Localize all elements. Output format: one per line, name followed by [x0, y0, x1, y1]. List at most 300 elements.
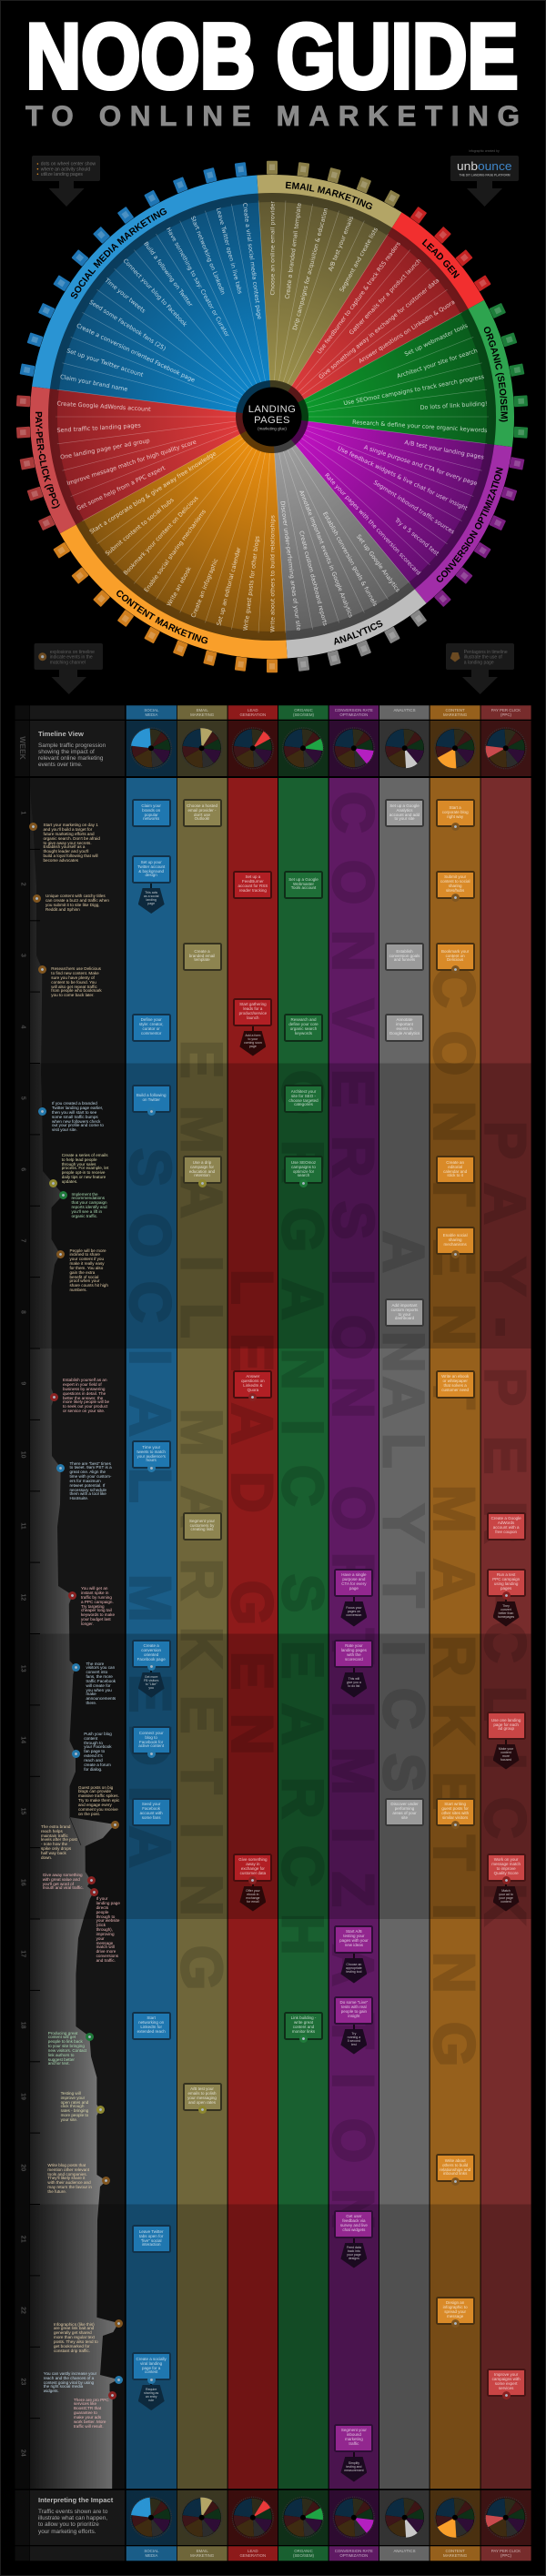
- watermark channel names: CONTENT MARKETING: [422, 966, 486, 2066]
- task: social 7: Connect your: [139, 1731, 164, 1735]
- pentagon: testing tool: Choose an: [346, 1962, 361, 1965]
- note: blog posts mention: [47, 2163, 92, 2194]
- task: organic 2: define your core: [288, 1022, 318, 1026]
- task: social 8: Facebook: [142, 1806, 160, 1811]
- arrow: right top: [467, 181, 502, 207]
- pentagon: match ad: your page: [499, 1896, 513, 1900]
- header: ppc top: (PPC): [500, 712, 511, 717]
- pentagon: convert better: They: [502, 1603, 510, 1607]
- pentagon: require sharing: Require: [146, 2388, 157, 2391]
- callout: unbounce logo: THE DIY LANDING PAGE PLATFORM: [460, 173, 511, 177]
- arrow: right bottom: [462, 670, 498, 694]
- note: link back: to your site bringing: [48, 2044, 85, 2048]
- task: social 1: brands on: [142, 808, 160, 813]
- mini pie: ppc top: [485, 728, 526, 769]
- task: analytics 5: Discover under: [390, 1802, 419, 1806]
- note: blog posts mention: mention other relevant: [47, 2167, 89, 2172]
- note: social sharing: inclined to share: [69, 1252, 100, 1257]
- task: lead 4: [233, 1853, 272, 1882]
- note: link back: anchor text.: [48, 2061, 70, 2066]
- task: lead 3: Answer: [246, 1374, 259, 1379]
- callout: pentagons legend: a landing page: [464, 660, 494, 665]
- heading: interpreting the impact: Interpreting the Impact: [38, 2496, 113, 2504]
- task: social 10: interaction: [142, 2242, 161, 2247]
- note: social widgets: contest going viral by using: [44, 2380, 94, 2385]
- task: lead 4: customer data: [240, 1871, 266, 1875]
- task: conversion 2: with the: [347, 1652, 361, 1657]
- pentagon: social landing page: [138, 884, 165, 914]
- task: conversion 1: CTA for every: [341, 1581, 366, 1586]
- pentagon: testing tool: [340, 1953, 367, 1984]
- task: content 1: right way: [447, 814, 463, 819]
- wheel activity labels: right half: Research & define your core organic keywords: [352, 419, 488, 434]
- task: ppc 3: [487, 1711, 526, 1740]
- task: social 7: Facebook for: [139, 1740, 163, 1743]
- task: email 3: [182, 1156, 222, 1184]
- note: best times to tweet: retweet potential. If: [69, 1483, 105, 1488]
- callout: unbounce logo: unbounce: [457, 160, 512, 173]
- task: social 8: account with: [140, 1811, 163, 1815]
- note: blog posts mention: may return the favour in: [47, 2185, 92, 2189]
- note: click through: conversions: [96, 1954, 118, 1958]
- task: email 4: creating lists: [190, 1527, 213, 1531]
- task: analytics 4: [385, 1298, 424, 1327]
- note: push blog content: extend it's: [84, 1753, 103, 1758]
- header: email top: [190, 708, 214, 717]
- callout: unbounce logo: infographic created by: [469, 149, 500, 153]
- task: social 11: Create a socially: [136, 2357, 167, 2361]
- pentagon: convert better: better than: [499, 1611, 513, 1614]
- note: infographics: generally get shared: [54, 2330, 92, 2335]
- note: guest posts: Guest posts on big: [78, 1785, 113, 1790]
- task: ppc 1: free coupon: [495, 1530, 517, 1534]
- note: answering questions: to seek out your product: [63, 1404, 107, 1409]
- task: social 10: tabs open for: [139, 2234, 163, 2238]
- wheel divider lines: [56, 200, 489, 633]
- heading: timeline view: Timeline View: [38, 730, 84, 737]
- note: push blog content: create a forum: [84, 1763, 111, 1767]
- task: organic 3: Architect your: [291, 1089, 316, 1094]
- note: infographics: constant drip traffic.: [54, 2349, 90, 2353]
- pentagon: feed data back: Feed data: [347, 2246, 361, 2249]
- week numbers: 9: [20, 1381, 25, 1385]
- note: campaign recommendations: Implement the: [71, 1192, 98, 1197]
- task: content 3: [436, 943, 475, 970]
- wheel activity labels: left half: Build a following on Twitter: [142, 240, 195, 308]
- task: organic 3: [284, 1085, 323, 1113]
- wheel channel names on ring: ORGANIC (SEO/SEM): [484, 327, 508, 422]
- task: content 2: sharing: [449, 884, 462, 888]
- mini pie: content top: [435, 728, 475, 769]
- note: guest posts: blogs can provide: [78, 1789, 111, 1793]
- note: week 1: build a loyal following that will: [44, 854, 98, 858]
- note: twitter landing page: Twitter landing page earlier,: [52, 1106, 103, 1110]
- task: ppc 3: ad group: [498, 1726, 514, 1731]
- task: content 4: editorial: [448, 1165, 462, 1169]
- task: social 5: tweets to match: [136, 1450, 166, 1454]
- note: pro ppc services: BoostCTR that: [74, 2406, 101, 2410]
- pentagon: simplify testing: measurement: [344, 2468, 364, 2471]
- header: content bottom: CONTENT: [445, 2548, 465, 2553]
- task: social 1: networks: [143, 816, 159, 821]
- wheel activity labels: right half: Gather emails for a product launch: [348, 258, 422, 337]
- mini pie: email top: [181, 728, 222, 769]
- note: facebook fans: The more: [86, 1662, 104, 1666]
- task: analytics 5: areas of your: [392, 1811, 417, 1815]
- pentagon: social landing page: This acts: [145, 891, 157, 894]
- week numbers: 23: [20, 2379, 25, 2385]
- wheel activity labels: left half: Get some help from a PPC expert: [76, 464, 167, 512]
- wheel activity labels: right half: Use SEOmoz campaigns to track search progress: [343, 373, 485, 407]
- note: twitter landing page: some small traffic bumps: [52, 1115, 98, 1119]
- task: content 7: similar visitors: [442, 1815, 468, 1820]
- task: analytics 2: [385, 943, 424, 970]
- text: interpreting description: to allow you to prioritize: [38, 2521, 99, 2528]
- note: unique content: can create a buzz and traffic when: [46, 898, 109, 903]
- task: social 1: Claim your: [141, 803, 161, 808]
- task: lead 3: questions on: [241, 1379, 265, 1383]
- note: facebook fans: traffic Facebook: [86, 1679, 116, 1683]
- pentagon: simplify testing: [340, 2451, 367, 2482]
- watermark channel names: LEAD GEN: [220, 1269, 284, 1754]
- note: click through: people: [96, 1910, 108, 1914]
- note: push blog content: your Facebook: [84, 1744, 112, 1749]
- wheel activity labels: left half: [56, 202, 276, 632]
- pentagon: coming soon form: coming soon: [244, 1041, 262, 1045]
- task: email 1: [182, 799, 222, 827]
- task: ppc 1: account with a: [493, 1525, 519, 1530]
- note: blog posts mention: with their audience and: [47, 2180, 91, 2185]
- note: social sharing: for them. You also: [69, 1266, 103, 1270]
- task: analytics 4: custom reports: [391, 1308, 418, 1312]
- header: content bottom: [443, 2548, 467, 2558]
- task: social 5: hours: [147, 1458, 157, 1462]
- wheel outer tabs: [16, 161, 528, 672]
- note: unique content: Unique content with catchy titles: [46, 894, 106, 898]
- note: click through: landing page: [96, 1901, 120, 1905]
- wheel activity labels: right half: A single purpose and CTA for every page: [363, 443, 479, 487]
- task: organic 4: campaigns to: [291, 1165, 316, 1169]
- note: extra brand reach: down.: [41, 1855, 52, 1860]
- task: social 7: active content: [138, 1743, 164, 1748]
- task: content 7: Start writing: [444, 1802, 466, 1806]
- wheel activity labels: right half: Create custom dashboard reports: [298, 530, 329, 627]
- note: click through: your website: [96, 1918, 119, 1923]
- task: content 2: Submit your: [444, 874, 466, 879]
- note: blog posts mention: tools and companies.: [47, 2172, 87, 2177]
- task: organic 2: organic search: [290, 1026, 317, 1031]
- note: give away: Give away something: [43, 1873, 83, 1877]
- task: conversion 3: pages with your: [339, 1938, 369, 1943]
- note: week 1: Start your marketing on day 1: [44, 823, 98, 827]
- text: interpreting description: your marketing efforts.: [38, 2529, 96, 2535]
- task: organic 2: keywords: [295, 1031, 312, 1035]
- task: conversion 6: inbound: [347, 2432, 361, 2437]
- note: best times to tweet: necessary schedule: [69, 1488, 106, 1492]
- panel: channel columns: [126, 778, 531, 2489]
- header: analytics bottom: ANALYTICS: [393, 2548, 416, 2553]
- note: twitter landing page: visit your site.: [52, 1127, 77, 1132]
- task: email 4: Segment your: [189, 1519, 215, 1523]
- task: ppc 1: AdWords: [498, 1520, 514, 1525]
- task: organic 5: [284, 2011, 323, 2040]
- wheel activity labels: left half: One landing page per ad group: [60, 437, 150, 461]
- note: extra brand reach: reach helps: [41, 1829, 63, 1834]
- note: push blog content: through to: [84, 1741, 103, 1745]
- task: content 4: calendar and: [443, 1168, 467, 1174]
- callout: dots explanation: utilize landing pages: [41, 172, 83, 177]
- header: organic top: [293, 708, 314, 717]
- pentagon: convert better: [493, 1600, 519, 1627]
- task: content 7: [436, 1798, 475, 1825]
- task: analytics 2: Establish: [396, 949, 413, 954]
- note: twitter landing page: out your profile and come to: [52, 1123, 104, 1127]
- note: email testing: Testing will: [61, 2091, 81, 2096]
- pentagon: to do list: give you a: [347, 1680, 361, 1683]
- note: push blog content: content: [84, 1736, 97, 1741]
- task: organic 5: monitor links: [292, 2029, 315, 2034]
- mini pie: organic bottom: [283, 2497, 323, 2538]
- wheel hub: landing pages: (marketing glue): [258, 426, 287, 431]
- task: content 1: [436, 799, 475, 827]
- note: link back: Producing great: [48, 2031, 77, 2036]
- pentagon: to do list: This will: [349, 1676, 359, 1680]
- task: social 8: Seed your: [142, 1802, 160, 1806]
- task: analytics 3: Annotate: [396, 1017, 413, 1022]
- pentagon: convert better: convert: [500, 1607, 511, 1611]
- pentagon: match ad: content: [500, 1900, 511, 1904]
- task: email 5: and open rates: [188, 2100, 216, 2105]
- week numbers: WEEK: [18, 736, 27, 761]
- note: week 1: Establish yourself as a: [44, 844, 85, 849]
- note: email testing: open rates and: [61, 2100, 88, 2105]
- note: delicious: sure you have plenty of: [51, 975, 95, 980]
- note: ppc spike: instant spike in: [81, 1591, 108, 1595]
- note: push blog content: [84, 1732, 112, 1772]
- task: social 5: Time your: [142, 1445, 160, 1450]
- wheel activity labels: left half: Have something to say: Creator or Curator: [165, 227, 231, 338]
- note: infographics: more than regular text: [54, 2335, 95, 2339]
- task: content 6: Write an ebook: [441, 1374, 469, 1379]
- note: blog posts mention: Write blog posts that: [47, 2163, 86, 2167]
- task: content 9: message: [447, 2314, 463, 2318]
- task: analytics 3: [385, 1014, 424, 1041]
- task: content 1: corporate blog: [442, 810, 469, 814]
- pentagon: more focused: [493, 1740, 519, 1769]
- wheel activity labels: right half: Segment and create lists: [338, 226, 379, 293]
- task: social 5: your audience's: [136, 1454, 166, 1458]
- task: conversion 1: Have a single: [341, 1572, 367, 1577]
- note: social sharing: proof when your: [69, 1278, 99, 1283]
- note: email testing: [60, 2091, 88, 2122]
- task: lead 4: exchange for: [241, 1866, 265, 1871]
- note: pro ppc services: There are pro PPC: [74, 2398, 109, 2402]
- text: timeline description: showing the impact of: [38, 749, 95, 755]
- wheel activity labels: right half: Choose an online email provider: [268, 201, 276, 295]
- task: content 7: guest posts for: [441, 1806, 469, 1811]
- task: analytics 3: important: [396, 1022, 413, 1026]
- note: ppc spike: Try targeting: [81, 1604, 105, 1609]
- note: facebook fans: [86, 1662, 116, 1705]
- week numbers: 5: [20, 1096, 25, 1100]
- note: blog posts mention: They'll likely share it: [47, 2176, 85, 2180]
- task: email 3: retention: [194, 1173, 210, 1177]
- task: lead 3: LinkedIn &: [243, 1383, 263, 1388]
- note: week 1: future marketing efforts and: [44, 832, 95, 836]
- note: extra brand reach: [41, 1824, 77, 1860]
- note: email series: process. For example, let: [62, 1166, 108, 1170]
- note: guest posts: and engage every: [78, 1803, 112, 1807]
- header: conversion bottom: CONVERSION RATE: [335, 2548, 373, 2553]
- mini pie: analytics top: [384, 728, 425, 769]
- wheel activity labels: right half: [268, 201, 488, 631]
- task: conversion 1: purpose and: [342, 1577, 365, 1581]
- note: social sharing: share counts hit high: [69, 1283, 108, 1288]
- mini pie: conversion top: [333, 728, 374, 769]
- header: lead top: [239, 708, 266, 717]
- task: analytics 1: to your site: [394, 816, 415, 821]
- wheel activity labels: left half: Write about others to build relationships: [268, 514, 276, 632]
- note: ppc spike: longer.: [81, 1621, 94, 1626]
- note: link back: [47, 2031, 87, 2066]
- note: campaign recommendations: you'll see a lift in: [71, 1209, 102, 1214]
- task: organic 2: Research and: [290, 1017, 317, 1022]
- callout: dots explanation: where an activity should: [41, 167, 90, 172]
- task: content 4: [436, 1156, 475, 1184]
- note: link back: suggest better: [48, 2057, 75, 2062]
- task: email 3: campaign for: [190, 1165, 214, 1169]
- header: ppc bottom: PAY PER CLICK: [491, 2548, 521, 2553]
- note: click through: [96, 1896, 120, 1963]
- wheel inner wedges: [48, 193, 496, 641]
- task: organic 4: Use SEOmoz: [291, 1160, 316, 1165]
- note: pro ppc services: services like: [74, 2401, 96, 2406]
- task: social 9: [132, 2011, 171, 2040]
- task: content 8: inbound links: [443, 2171, 467, 2176]
- task: ppc 1: Create a Google: [491, 1516, 521, 1520]
- wheel ring sectors: [30, 175, 514, 659]
- note: give away: [42, 1873, 84, 1890]
- callout: explosions legend: matching channel: [50, 660, 86, 665]
- note: facebook fans: announcements: [86, 1696, 116, 1701]
- task: content 1: Start a: [450, 805, 461, 810]
- task: conversion 6: Segment your: [341, 2428, 367, 2432]
- pentagon: social landing page: as a social: [144, 894, 158, 898]
- task: organic 1: Set up a Google: [288, 877, 318, 882]
- task: social 10: Leave Twitter: [139, 2229, 164, 2234]
- note: pro ppc services: traffic will result.: [74, 2424, 104, 2429]
- text: timeline description: events over time.: [38, 762, 83, 768]
- note: social widgets: the right social media: [44, 2384, 83, 2389]
- wheel activity labels: right half: Use feedburner to capture & track RSS readers: [316, 240, 402, 356]
- task: content 6: or whitepaper: [443, 1379, 468, 1383]
- week numbers: 12: [20, 1594, 25, 1601]
- pentagon: ebook offer: Offer your: [246, 1889, 260, 1893]
- task: ppc 5: campaigns with: [492, 2377, 521, 2381]
- task: lead 2: product/service: [239, 1011, 267, 1015]
- note: week 1: organic search. Don't be afraid: [44, 836, 100, 841]
- header: content bottom: MARKETING: [443, 2553, 467, 2558]
- text: interpreting description: Traffic events shown are to: [38, 2509, 107, 2515]
- panel: channel column headers top: [126, 705, 531, 720]
- week numbers: 22: [20, 2307, 25, 2314]
- note: campaign recommendations: [71, 1192, 107, 1218]
- task: ppc 4: Work on your: [494, 1857, 518, 1862]
- task: social 4: [132, 1085, 171, 1112]
- task: lead 1: account for RSS: [238, 884, 268, 888]
- pentagon: match ad: your ad to: [499, 1893, 513, 1896]
- pentagon: require sharing: sharing as: [144, 2391, 158, 2395]
- note: blog posts mention: the future.: [47, 2189, 66, 2194]
- task: email 2: Create a: [194, 949, 210, 954]
- note: extra brand reach: The extra brand: [41, 1824, 70, 1829]
- task: ppc 5: some expert: [495, 2381, 517, 2386]
- task: lead 1: reader tracking: [239, 888, 267, 893]
- wheel hub: landing pages: PAGES: [254, 415, 290, 426]
- task: ppc 3: Use one landing: [491, 1718, 521, 1722]
- wheel activity labels: right half: Establish conversion goals & funnels: [321, 510, 379, 608]
- pentagon: more focused: content: [500, 1751, 511, 1754]
- note: guest posts: massive traffic spikes.: [78, 1793, 119, 1798]
- note: week 1: and you'll build a target for: [44, 827, 92, 832]
- task: content 6: [436, 1370, 475, 1398]
- pentagon: testing tool: appropriate: [346, 1965, 362, 1969]
- header: organic bottom: (SEO/SEM): [293, 2553, 314, 2558]
- task: social 1: popular: [145, 812, 158, 817]
- task: ppc 5: services: [499, 2386, 513, 2390]
- wheel channel names on ring: ANALYTICS: [335, 621, 382, 645]
- header: social top: SOCIAL: [144, 708, 158, 712]
- note: email testing: more people to: [61, 2113, 88, 2117]
- header: ppc bottom: [491, 2548, 521, 2558]
- note: social sharing: numbers.: [69, 1288, 87, 1292]
- header: social bottom: [144, 2548, 158, 2558]
- task: social 10: [132, 2225, 171, 2253]
- watermark channel names: EMAIL MARKETING: [169, 1040, 233, 1990]
- note: answering questions: questions in detail. The: [63, 1391, 106, 1396]
- note: delicious: from people who bookmark: [51, 988, 102, 993]
- mini pie: lead top: [232, 728, 273, 769]
- callout: pentagons legend: illustrate the use of: [464, 655, 502, 661]
- note: answering questions: business by answering: [63, 1387, 105, 1391]
- task: ppc 5: [487, 2368, 526, 2397]
- wheel activity labels: left half: Time your tweets: [103, 276, 147, 315]
- note: email testing: click through: [61, 2104, 84, 2108]
- note: ppc spike: cheaper long tail: [81, 1608, 112, 1612]
- note: ppc spike: your budget last: [81, 1617, 111, 1621]
- task: analytics 1: Analytics: [396, 808, 413, 813]
- task: social 2: [132, 855, 171, 884]
- note: social sharing: benefit of social: [69, 1275, 98, 1279]
- watermark channel names: ANALYTICS: [371, 1231, 435, 1792]
- wheel activity labels: left half: Enable social sharing mechanisms: [143, 508, 207, 593]
- note: answering questions: or service on your site.: [63, 1409, 105, 1413]
- callout: unbounce logo: [450, 149, 519, 181]
- note: best times to tweet: Hootsuite.: [69, 1496, 88, 1500]
- pentagon: five second test: test: [351, 2042, 357, 2046]
- task: analytics 4: to your: [399, 1312, 410, 1316]
- note: twitter landing page: [52, 1101, 104, 1132]
- note: facebook fans: convert into: [86, 1670, 107, 1674]
- task: organic 5: write great: [294, 2020, 313, 2025]
- callout: dots explanation: dots on wheel center show: [41, 162, 96, 167]
- pentagon: fb likes: Get more: [145, 1675, 157, 1679]
- pentagon: social landing page: page: [147, 902, 155, 905]
- task: content 9: spread your: [444, 2309, 466, 2314]
- note: delicious: content to be found. You: [51, 980, 96, 985]
- mini pie: email bottom: [181, 2497, 222, 2538]
- task: conversion 5: Get user: [346, 2214, 362, 2218]
